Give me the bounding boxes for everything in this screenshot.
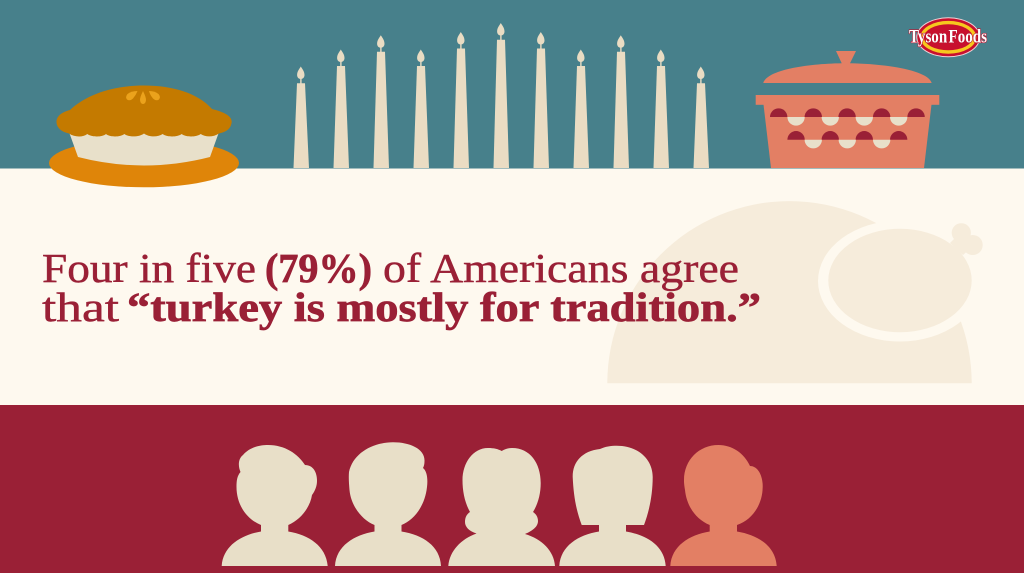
candle 10: [654, 50, 669, 168]
headline text: that: [42, 284, 120, 330]
person 3: [448, 448, 555, 566]
headline text: Four in five: [42, 245, 256, 291]
logo: Tyson Foods: [909, 17, 987, 57]
panel: teal table backdrop: [0, 0, 1024, 168]
pot lid: [763, 51, 932, 83]
turkey wing ring: [818, 220, 982, 342]
logo: Tyson Foods: Tyson Foods: [909, 28, 987, 48]
candle 4: [414, 50, 429, 168]
turkey wing: [828, 229, 972, 332]
headline text: [42, 245, 761, 330]
panel: red audience band: [0, 405, 1024, 573]
person 5: [670, 445, 777, 566]
headline text: “turkey is mostly for tradition.”: [127, 284, 761, 330]
pot rim: [756, 95, 939, 105]
pie crust vents: [126, 91, 160, 104]
headline text: (79%): [265, 245, 372, 291]
candle 1: [294, 66, 309, 168]
panel: cream tablecloth: [0, 168, 1024, 405]
candle 3: [374, 35, 389, 168]
people silhouettes: [222, 442, 777, 566]
person 1: [222, 445, 328, 566]
pot pattern: red semicircles: [770, 108, 925, 140]
icon: pie on plate: [49, 86, 239, 187]
candle 5: [454, 32, 469, 168]
icon: casserole pot: [756, 51, 939, 168]
candle 6: [494, 23, 509, 168]
candle 8: [574, 50, 589, 168]
headline text: of Americans agree: [383, 245, 739, 291]
candle 2: [334, 50, 349, 168]
pot pattern: cream semicircles: [787, 117, 907, 148]
icon: turkey silhouette: [607, 201, 983, 383]
candle 11: [694, 66, 709, 168]
pie top crust: [56, 86, 232, 136]
candle 7: [534, 32, 549, 168]
pie plate: [49, 139, 239, 187]
person 2: [335, 442, 441, 566]
turkey body: [607, 201, 972, 383]
icon: row of candles: [294, 23, 709, 168]
pie filling dish: [69, 132, 219, 166]
candle 9: [614, 35, 629, 168]
pot body: [764, 104, 932, 168]
turkey drumstick bone: [950, 235, 973, 255]
person 4: [559, 446, 666, 566]
